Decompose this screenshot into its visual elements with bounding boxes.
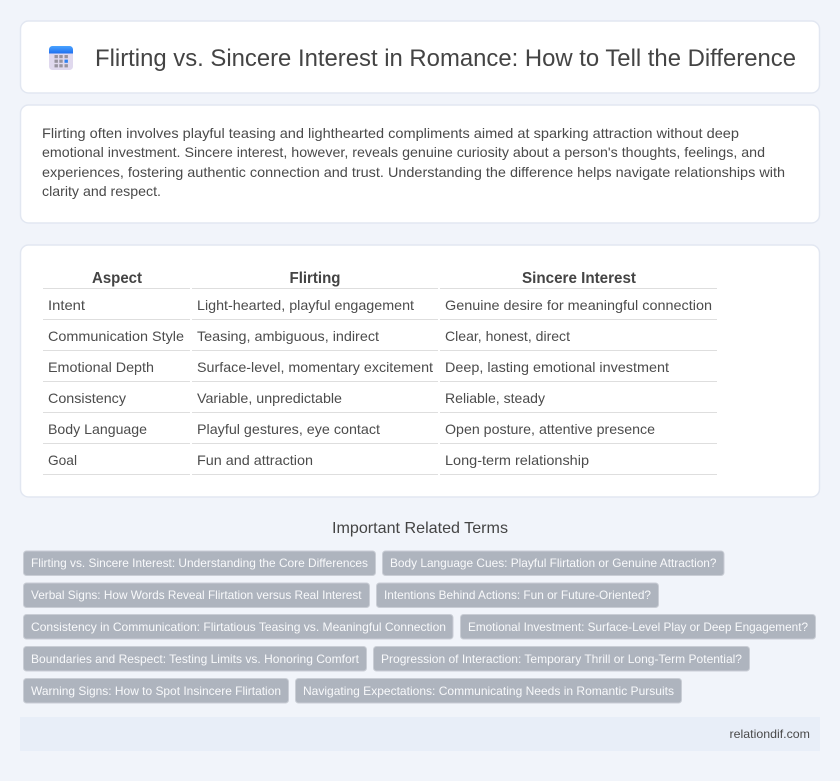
tag: intentions: Intentions Behind Actions: Fun or Future-Oriented? bbox=[384, 588, 651, 602]
row: goal: Goal bbox=[48, 452, 77, 468]
tag: warning signs: Warning Signs: How to Spot Insincere Flirtation bbox=[31, 684, 281, 698]
row: goal: Long-term relationship bbox=[445, 452, 589, 468]
tag: boundaries: Boundaries and Respect: Testing Limits vs. Honoring Comfort bbox=[31, 652, 360, 666]
row: goal bbox=[48, 452, 589, 468]
row: consistency: Consistency bbox=[48, 390, 126, 406]
heading: related terms: Important Related Terms bbox=[332, 520, 508, 537]
row: emotional depth bbox=[48, 359, 669, 375]
panel: comparison table bbox=[20, 245, 820, 497]
tag: core differences: Flirting vs. Sincere Interest: Understanding the Core Differences bbox=[31, 556, 368, 570]
tag: intentions bbox=[376, 583, 658, 608]
row: communication style bbox=[48, 328, 570, 344]
row: intent bbox=[48, 297, 712, 313]
tag: navigating expectations bbox=[296, 678, 682, 703]
row: intent: Genuine desire for meaningful connection bbox=[445, 297, 712, 313]
table header row: Aspect bbox=[92, 270, 143, 287]
tag: emotional investment: Emotional Investment: Surface-Level Play or Deep Engagement? bbox=[468, 620, 808, 634]
table header row: Sincere Interest bbox=[522, 270, 637, 287]
tag: verbal signs: Verbal Signs: How Words Reveal Flirtation versus Real Interest bbox=[31, 588, 362, 602]
row: consistency bbox=[48, 390, 545, 406]
intro text: emotional investment. Sincere interest, however, reveals genuine curiosity about a person's thoughts, feelings, and bbox=[42, 144, 765, 160]
table header row bbox=[92, 270, 637, 287]
row: intent: Light-hearted, playful engagement bbox=[197, 297, 414, 313]
intro text: clarity and respect. bbox=[42, 183, 161, 199]
tag: consistency bbox=[24, 614, 453, 639]
row: body language: Open posture, attentive presence bbox=[445, 421, 655, 437]
tag: progression: Progression of Interaction: Temporary Thrill or Long-Term Potential? bbox=[381, 652, 742, 666]
row: body language bbox=[48, 421, 655, 437]
row: emotional depth: Emotional Depth bbox=[48, 359, 154, 375]
row: intent: Intent bbox=[48, 297, 85, 313]
panel: related term tags bbox=[24, 551, 816, 703]
tag: core differences bbox=[24, 551, 376, 576]
tag: boundaries bbox=[24, 646, 366, 671]
row: consistency: Reliable, steady bbox=[445, 390, 545, 406]
footer bbox=[20, 717, 820, 751]
icon: calendar bbox=[49, 46, 73, 70]
row: body language: Playful gestures, eye contact bbox=[197, 421, 380, 437]
row: goal: Fun and attraction bbox=[197, 452, 313, 468]
tag: body language cues bbox=[382, 551, 724, 576]
table header row: Flirting bbox=[290, 270, 340, 287]
tag: warning signs bbox=[24, 678, 288, 703]
tag: navigating expectations: Navigating Expectations: Communicating Needs in Romantic Pursuits bbox=[303, 684, 674, 698]
row: communication style: Communication Style bbox=[48, 328, 184, 344]
tag: progression bbox=[374, 646, 750, 671]
panel: title header bbox=[20, 21, 820, 93]
panel: introduction bbox=[20, 105, 820, 223]
row: emotional depth: Surface-level, momentary excitement bbox=[197, 359, 433, 375]
intro text: experiences, fostering authentic connection and trust. Understanding the difference helps navigate relationships with bbox=[42, 164, 785, 180]
intro text bbox=[42, 125, 785, 199]
footer source: relationdif.com bbox=[730, 727, 810, 741]
tag: body language cues: Body Language Cues: Playful Flirtation or Genuine Attraction? bbox=[390, 556, 717, 570]
row: communication style: Teasing, ambiguous, indirect bbox=[197, 328, 379, 344]
row: consistency: Variable, unpredictable bbox=[197, 390, 342, 406]
intro text: Flirting often involves playful teasing and lighthearted compliments aimed at sparking attraction without deep bbox=[42, 125, 739, 141]
tag: emotional investment bbox=[460, 614, 816, 639]
tag: verbal signs bbox=[24, 583, 370, 608]
row: emotional depth: Deep, lasting emotional investment bbox=[445, 359, 669, 375]
row: body language: Body Language bbox=[48, 421, 147, 437]
title: Flirting vs. Sincere Interest in Romance: How to Tell the Difference bbox=[95, 45, 796, 72]
row: communication style: Clear, honest, direct bbox=[445, 328, 570, 344]
tag: consistency: Consistency in Communication: Flirtatious Teasing vs. Meaningful Connection bbox=[31, 620, 446, 634]
